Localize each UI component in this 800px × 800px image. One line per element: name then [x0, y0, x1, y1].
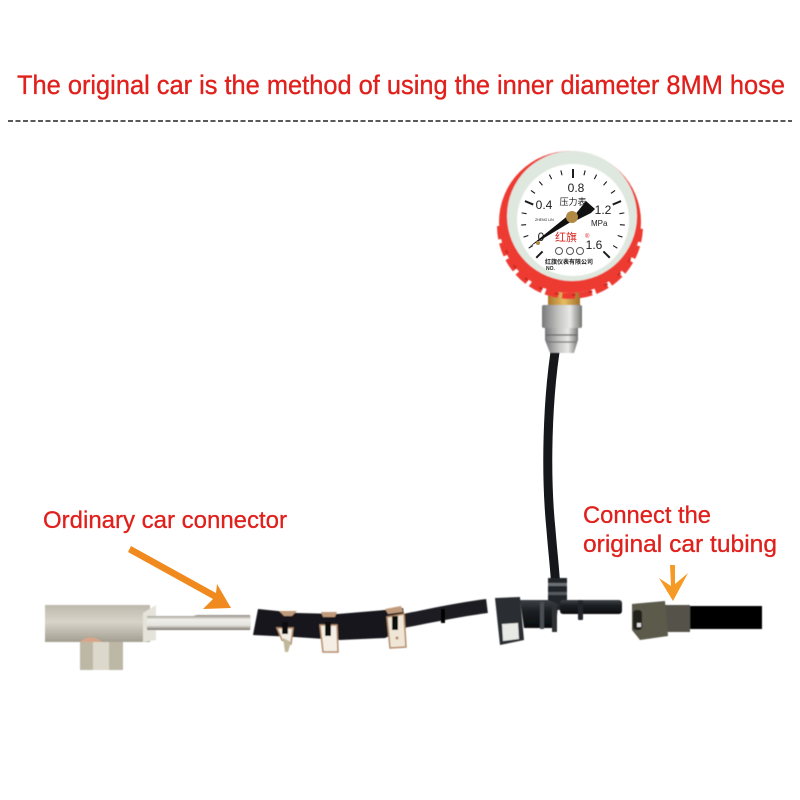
clamp three [385, 606, 406, 648]
connector body [520, 600, 558, 628]
clamp two [320, 612, 338, 652]
dial captions [535, 196, 608, 272]
clamp one [277, 611, 297, 652]
dial numbers: 0.8 [568, 181, 585, 195]
hex nut fitting [542, 305, 582, 328]
thin black tube [403, 606, 487, 621]
needle [529, 201, 595, 247]
orange arrow to nozzle [128, 546, 231, 609]
gauge dial details [521, 169, 625, 272]
dial captions: ZHENG LIN [535, 218, 554, 222]
hex nut [632, 601, 668, 640]
pressure gauge [499, 151, 641, 353]
rail body [45, 605, 150, 642]
certification marks [556, 248, 584, 254]
dial captions: 压力表 [559, 196, 587, 207]
dial numbers: 1.6 [586, 238, 603, 252]
dial face [517, 164, 629, 276]
dial captions: NO. [546, 266, 556, 272]
connector head [495, 597, 524, 645]
label: connect the original car tubing [583, 502, 777, 558]
dial numbers: 0 [538, 230, 545, 244]
right spigot [560, 600, 622, 614]
dial numbers: 1.2 [595, 203, 612, 217]
dial numbers [536, 181, 612, 252]
red housing [499, 151, 641, 293]
dial numbers: 0.4 [536, 198, 553, 212]
black tube [688, 606, 762, 629]
fuel rail block [45, 605, 251, 670]
original car tube with nut [632, 601, 762, 640]
bezel ring [507, 151, 637, 281]
brass stem [548, 288, 580, 306]
vertical branch [548, 578, 567, 610]
label: ordinary car connector: Ordinary car connector [43, 507, 287, 534]
label: connect the original car tubing: original car tubing [583, 531, 777, 558]
connector nozzle [147, 615, 251, 630]
orange arrow to tube nut [659, 565, 688, 601]
label: connect the original car tubing: Connect the [583, 502, 711, 529]
dial ticks [521, 169, 625, 258]
rail stem [80, 640, 123, 670]
lower compression fitting [545, 328, 578, 353]
black quick connector T fitting [495, 578, 622, 645]
dial captions: ® [585, 233, 590, 240]
rubber sleeve [253, 608, 406, 640]
dial captions: 红旗 [555, 230, 577, 244]
dial captions: 红旗仪表有限公司 [545, 258, 593, 266]
pressure hose from gauge to T connector [548, 352, 556, 590]
collar [665, 605, 690, 632]
dial captions: MPa [591, 219, 608, 228]
white window [502, 623, 519, 641]
rubber hose with clamps [253, 606, 487, 652]
